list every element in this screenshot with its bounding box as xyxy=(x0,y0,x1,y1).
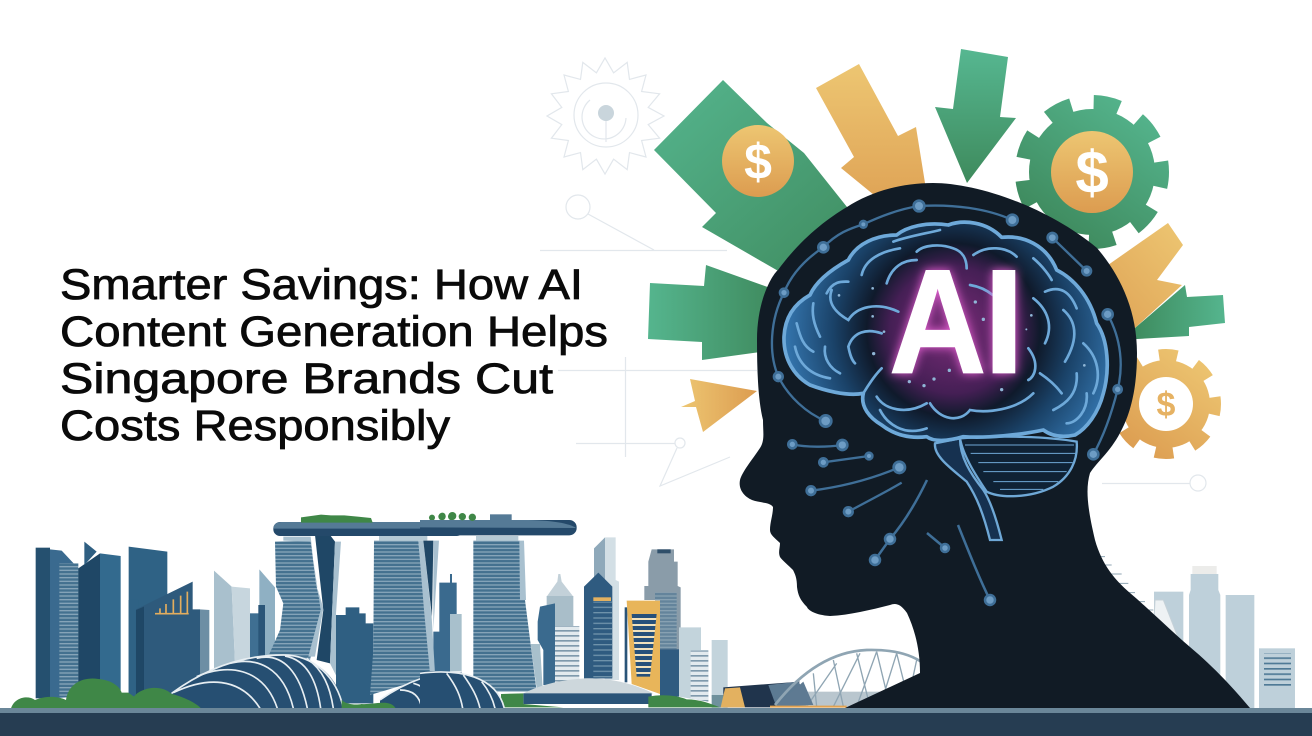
brain stem and cerebellum xyxy=(935,437,1077,540)
AI glow: I xyxy=(983,240,1025,405)
Marina Bay Sands tower three xyxy=(473,536,543,692)
gold tower xyxy=(625,601,660,694)
ledger-like stripes on pale building xyxy=(1264,653,1291,688)
arrow: small gold xyxy=(681,379,757,432)
dome two xyxy=(380,672,462,708)
sky park xyxy=(273,513,463,536)
title: Content Generation Helps xyxy=(60,308,608,356)
arrow: large green with coin xyxy=(654,80,900,300)
light building xyxy=(450,614,462,672)
navy tower xyxy=(584,573,612,678)
low towers beside gold tower xyxy=(660,627,728,708)
tower group two with gold chart xyxy=(129,547,209,697)
head silhouette xyxy=(740,183,1250,708)
small blue tower xyxy=(433,574,457,673)
circuit lines and nodes xyxy=(772,201,1122,516)
skyline right: pale towers xyxy=(1098,557,1295,708)
brain illustration xyxy=(772,201,1122,540)
AI label: I xyxy=(983,240,1025,405)
icon: green gear with dollar: $ xyxy=(1075,139,1109,206)
ground strip xyxy=(0,708,1312,736)
brain outline xyxy=(784,222,1107,440)
skyline left: downtown towers and Marina Bay Sands xyxy=(11,513,463,708)
skyline middle: towers, stadium and bridge xyxy=(420,512,923,708)
dome edge xyxy=(420,671,504,708)
neural specks xyxy=(838,287,1086,391)
faint node and lines xyxy=(540,195,1206,491)
title: Smarter Savings: How AI xyxy=(60,261,583,309)
arrow: green down xyxy=(935,49,1016,183)
title xyxy=(60,261,608,450)
cost-reduction arrows and gears xyxy=(648,49,1225,452)
cone-roof tower xyxy=(538,574,579,685)
roof hump and eastern deck xyxy=(420,512,577,535)
icon: gold gear with dollar: $ xyxy=(1157,386,1176,424)
title: Costs Responsibly xyxy=(60,402,451,450)
arrow: gold down xyxy=(816,64,930,230)
AI glow: A xyxy=(889,240,986,405)
Marina Bay Sands tower one xyxy=(267,535,341,680)
AI label: A xyxy=(889,240,986,405)
grey tower xyxy=(644,549,681,650)
mid building xyxy=(336,607,373,703)
lower neck circuit nodes xyxy=(870,480,995,605)
brain folds xyxy=(795,230,1098,431)
arrow: gold right xyxy=(1080,223,1183,340)
icon: gold gear with dollar xyxy=(1118,356,1214,452)
arrow: green right xyxy=(1120,285,1225,340)
title: Singapore Brands Cut xyxy=(60,355,553,403)
stadium xyxy=(501,678,720,707)
faint technical line art xyxy=(540,58,1206,491)
arrow: green left xyxy=(648,265,790,360)
tower group one xyxy=(36,542,121,698)
bridge xyxy=(770,650,923,707)
icon: dollar coin: $ xyxy=(744,134,772,190)
icon: faint sun gear xyxy=(547,58,664,174)
greenery xyxy=(11,679,396,708)
dome one xyxy=(172,655,343,708)
tall light tower xyxy=(594,537,619,680)
fine dashes beside neck xyxy=(1098,557,1182,647)
light towers xyxy=(214,569,275,670)
icon: green gear with dollar xyxy=(1025,105,1159,239)
pale tower cluster xyxy=(1154,566,1295,708)
Marina Bay Sands tower two xyxy=(370,536,439,695)
museum buildings xyxy=(721,682,813,707)
icon: dollar coin xyxy=(722,125,794,197)
